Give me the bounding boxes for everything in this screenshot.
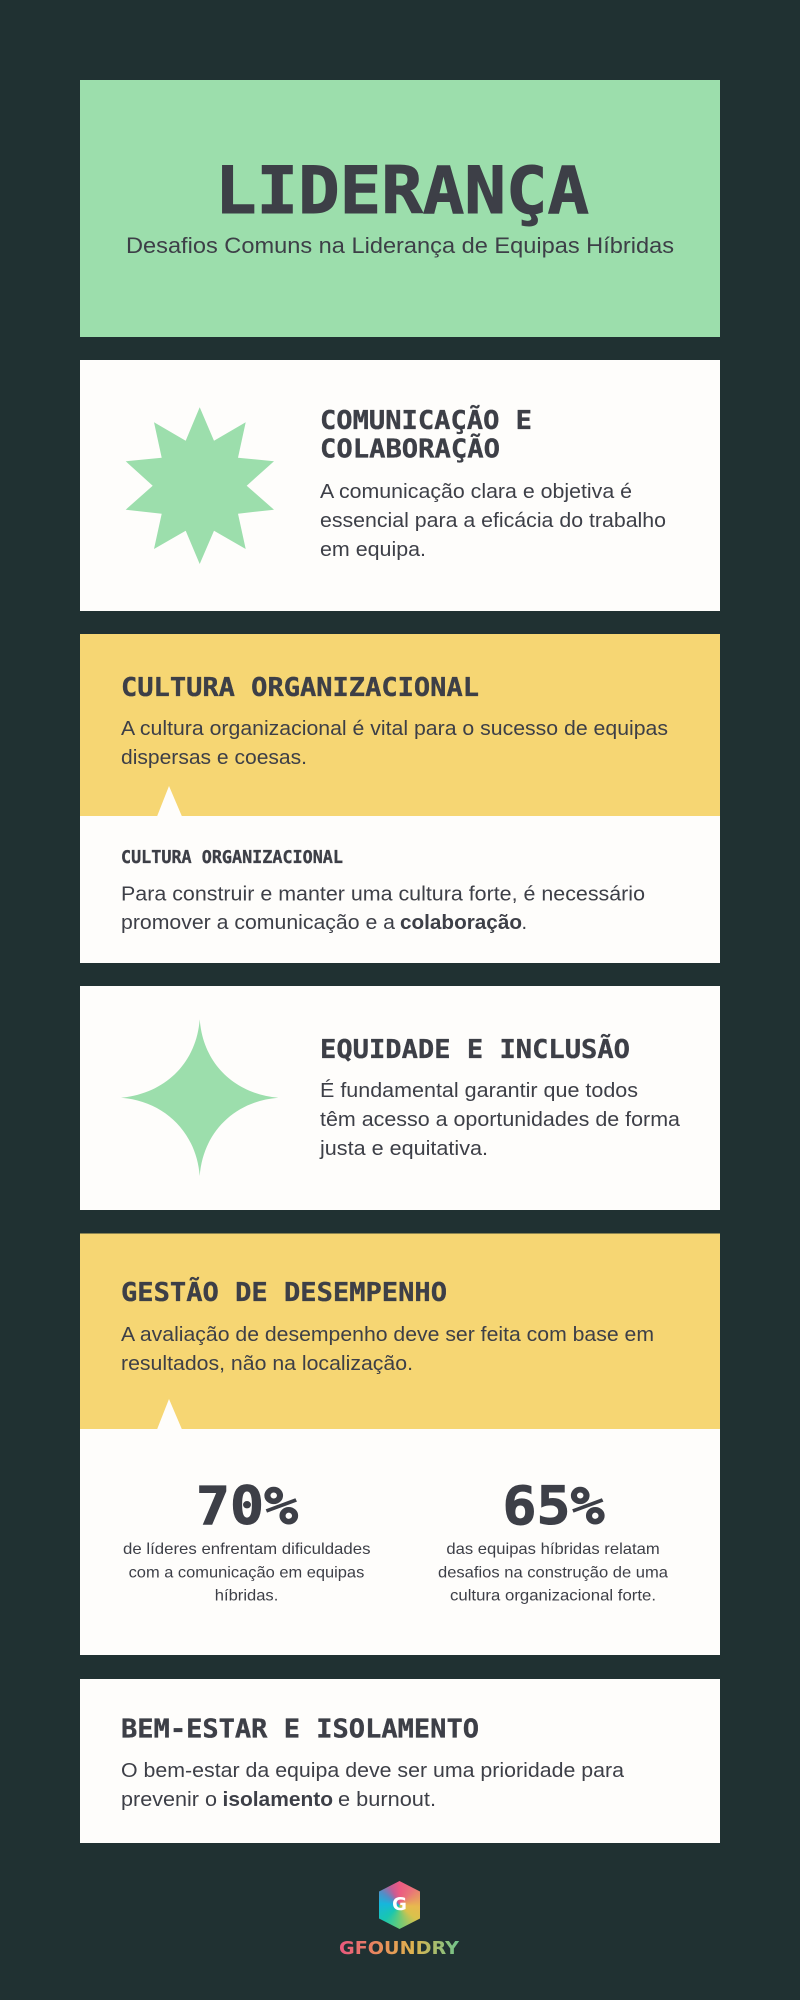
body text: justa e equitativa. [319, 1138, 488, 1160]
yellow header block [80, 1234, 720, 1429]
panel: equidade e inclusão [80, 986, 720, 1210]
body text: isolamento [222, 1789, 333, 1811]
stat: 65%: cultura organizacional forte. [450, 1588, 656, 1605]
panel: comunicação e colaboração [80, 360, 720, 611]
stat: 65%: desafios na construção de uma [438, 1565, 668, 1582]
pointer triangle [157, 786, 182, 816]
panel: gestão de desempenho [80, 1234, 720, 1655]
logo icon: gradient hexagon [379, 1881, 420, 1929]
subheading: CULTURA ORGANIZACIONAL [121, 848, 343, 868]
heading: GESTÃO DE DESEMPENHO [121, 1278, 447, 1308]
detail text: Para construir e manter uma cultura forte, é necessário [121, 884, 645, 906]
body text [320, 481, 666, 561]
stat: 65%: das equipas híbridas relatam [446, 1541, 660, 1558]
body text: em equipa. [320, 539, 426, 561]
description [121, 718, 668, 769]
stat: 70%: com a comunicação em equipas [129, 1565, 364, 1582]
title: LIDERANÇA [215, 154, 589, 229]
stat: 65% [438, 1476, 668, 1605]
body text: prevenir o [121, 1789, 217, 1811]
stat: 65%: 65% [502, 1476, 605, 1537]
heading: COLABORAÇÃO [320, 434, 500, 464]
icon: four-point star [121, 1019, 278, 1176]
white stats block [80, 1429, 720, 1655]
panel: bem-estar e isolamento [80, 1679, 720, 1843]
description: resultados, não na localização. [121, 1353, 413, 1375]
heading: CULTURA ORGANIZACIONAL [121, 673, 479, 703]
description: A cultura organizacional é vital para o sucesso de equipas [121, 718, 668, 740]
description: A avaliação de desempenho deve ser feita com base em [121, 1324, 654, 1346]
stat: 70%: 70% [196, 1476, 298, 1537]
body text: e burnout. [338, 1789, 436, 1811]
panel: cultura organizacional [80, 634, 720, 963]
subtitle: Desafios Comuns na Liderança de Equipas Híbridas [126, 233, 674, 258]
body text: têm acesso a oportunidades de forma [320, 1109, 681, 1131]
logo wordmark: GFOUNDRY [339, 1939, 459, 1959]
stat: 70% [123, 1476, 370, 1605]
description: dispersas e coesas. [121, 747, 307, 769]
detail text [121, 884, 645, 934]
stat: 70%: de líderes enfrentam dificuldades [123, 1541, 370, 1558]
body text [319, 1079, 681, 1160]
description [121, 1324, 654, 1375]
heading [320, 406, 532, 464]
detail text: . [522, 912, 527, 934]
panel: title header [80, 80, 720, 337]
body text [121, 1760, 625, 1811]
stat: 70%: híbridas. [215, 1588, 278, 1605]
body text: essencial para a eficácia do trabalho [320, 510, 666, 532]
body text: É fundamental garantir que todos [320, 1079, 638, 1102]
heading: EQUIDADE E INCLUSÃO [320, 1035, 630, 1065]
logo icon: gradient hexagon: G [392, 1894, 407, 1915]
yellow header block [80, 634, 720, 816]
pointer triangle [157, 1399, 182, 1430]
detail text: colaboração [400, 912, 522, 934]
detail text: promover a comunicação e a [121, 912, 396, 934]
heading: BEM-ESTAR E ISOLAMENTO [121, 1714, 479, 1744]
white detail block [80, 816, 720, 963]
body text: O bem-estar da equipa deve ser uma prioridade para [121, 1760, 625, 1782]
icon: ten-point star [126, 407, 274, 564]
body text: A comunicação clara e objetiva é [320, 481, 632, 503]
heading: COMUNICAÇÃO E [320, 406, 532, 436]
